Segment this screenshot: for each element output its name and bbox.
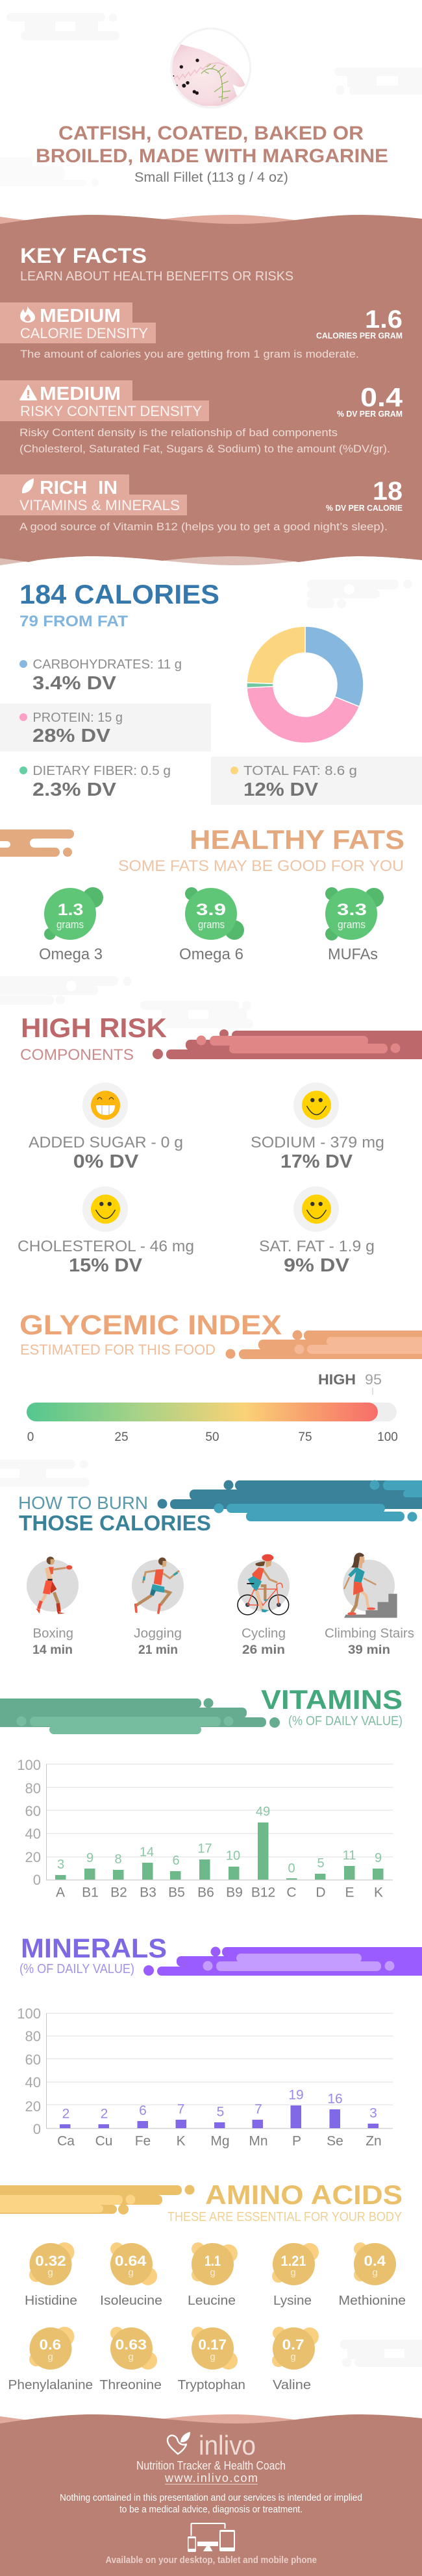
bar chart: minerals: 100 [17,2006,41,2022]
subheading: minerals: (% OF DAILY VALUE) [19,1962,134,1976]
amino acid: threonine: 0.63 [115,2337,147,2353]
legend: carbohydrates [19,657,182,694]
gauge: glycemic index: 50 [205,1430,219,1444]
bar chart: minerals: 16 [327,2091,343,2107]
amino acid: histidine: g [47,2267,53,2278]
panel: footer [0,2414,422,2576]
bar chart: vitamins: K [374,1885,383,1900]
bar chart: vitamins: 6 [172,1854,180,1868]
logo: inlivo: inlivo [199,2430,256,2460]
exercise: boxing [27,1556,79,1657]
gauge: glycemic index: 100 [377,1430,398,1444]
panel: key facts [0,215,422,578]
amino acid: valine [272,2327,319,2392]
legend: carbohydrates: 3.4% DV [32,673,117,694]
bar chart: vitamins: 49 [256,1805,270,1819]
risk item: added sugar: ADDED SUGAR - 0 g [29,1134,183,1151]
exercise: jogging: 21 min [138,1643,178,1657]
amino acid: phenylalanine [8,2327,93,2392]
legend: total fat: 12% DV [243,779,319,800]
amino acid: tryptophan: g [210,2351,216,2362]
fact: calorie density: CALORIE DENSITY [20,325,148,341]
subheading: healthy fats: SOME FATS MAY BE GOOD FOR YOU [118,857,404,875]
bar chart: vitamins: 0 [33,1872,41,1888]
gauge: glycemic index [27,1371,398,1444]
bar chart: vitamins: 80 [25,1780,41,1797]
icon: smiling emoji [91,1194,120,1224]
legend: total fat [211,757,422,805]
amino acid: tryptophan: Tryptophan [178,2378,245,2392]
title: BROILED, MADE WITH MARGARINE [36,145,388,167]
tagline: Nutrition Tracker & Health Coach [136,2459,286,2472]
icon: smiling emoji [302,1194,331,1224]
bar chart: minerals: 80 [25,2028,41,2044]
bar chart: vitamins: 11 [343,1848,356,1863]
legend: total fat: TOTAL FAT: 8.6 g [243,764,357,778]
amino acid: methionine [339,2242,406,2308]
amino acid: threonine [99,2327,162,2392]
bar chart: vitamins: 40 [25,1826,41,1842]
bar chart: vitamins: 60 [25,1803,41,1819]
subheading: key facts: LEARN ABOUT HEALTH BENEFITS OR RISKS [20,269,293,284]
risk item: saturated fat: 9% DV [284,1255,350,1276]
bar chart: minerals: Se [327,2134,343,2148]
fact: calorie density: MEDIUM [40,306,121,326]
bar chart: minerals: Mn [249,2134,268,2148]
stat: omega 6 [179,887,244,963]
fact: risky content density: % DV PER GRAM [337,409,403,419]
icon: flame [20,306,35,323]
title [36,123,388,167]
risk item: added sugar: 0% DV [73,1151,139,1172]
risk item: saturated fat: SAT. FAT - 1.9 g [259,1238,375,1255]
exercise: boxing: 14 min [32,1643,73,1657]
fact: rich in vitamins and minerals: A good source of Vitamin B12 (helps you to get a good night’s sleep). [19,521,388,533]
bar chart: vitamins: 5 [317,1856,325,1871]
bar chart: vitamins: E [345,1885,354,1900]
website: www.inlivo.com [164,2472,258,2484]
amino acid: methionine: 0.4 [364,2253,386,2269]
bar chart: minerals: Ca [57,2134,75,2148]
amino acid: leucine: g [210,2267,216,2278]
stat: omega 6: 3.9 [196,901,226,919]
bar chart: minerals: 60 [25,2052,41,2068]
stat: mufas: grams [338,918,366,931]
bar chart: minerals: 20 [25,2098,41,2115]
heading: minerals: MINERALS [21,1933,167,1963]
bar chart: vitamins: 9 [375,1851,382,1865]
risk item: sodium [251,1083,384,1172]
exercise: climbing stairs [325,1552,414,1657]
fact: rich in vitamins and minerals [0,474,403,533]
bar chart: minerals: 7 [177,2102,184,2117]
heading: amino acids: AMINO ACIDS [205,2179,403,2210]
amino acid: methionine: Methionine [339,2294,406,2308]
fact: risky content density: RISKY CONTENT DENSITY [20,403,202,419]
bar chart: minerals: 6 [139,2103,147,2118]
bar chart: vitamins: B6 [197,1885,214,1900]
bar chart: vitamins: C [286,1885,297,1900]
background cloud: amino acids [340,2340,422,2367]
stat: mufas: MUFAs [328,946,378,963]
amino acid: isoleucine: g [128,2267,134,2278]
heading: calories: 184 CALORIES [19,579,219,609]
banner shape: minerals [143,1947,422,1976]
fact: rich in vitamins and minerals: 18 [373,477,403,506]
subheading: amino acids: THESE ARE ESSENTIAL FOR YOUR BODY [168,2210,402,2224]
exercise: jogging [132,1558,184,1657]
stat: mufas: 3.3 [337,901,367,919]
legend: dietary fiber [19,764,171,800]
disclaimer: Nothing contained in this presentation and our services is intended or implied [60,2492,362,2503]
exercise: cycling: Cycling [242,1626,286,1641]
amino acid: phenylalanine: Phenylalanine [8,2378,93,2392]
amino acid: isoleucine [100,2242,162,2308]
fact: rich in vitamins and minerals: RICH IN [40,478,118,498]
bar chart: minerals: P [292,2134,301,2148]
bar chart: minerals: Cu [95,2134,112,2148]
bar chart: minerals: 2 [62,2107,69,2121]
gauge: glycemic index: 0 [27,1430,34,1444]
amino acid: methionine: g [372,2267,378,2278]
stat: omega 3: Omega 3 [39,946,103,963]
amino acid: valine: Valine [273,2378,311,2392]
icon: grinning emoji [91,1090,120,1120]
exercise: cycling [238,1554,290,1657]
bar chart: minerals: Mg [210,2134,230,2148]
gauge: glycemic index: HIGH [318,1371,356,1388]
bar chart: vitamins: 100 [17,1757,41,1773]
legend: protein [0,704,211,752]
stat: omega 3: 1.3 [58,901,83,919]
banner shape: glycemic index [226,1331,422,1359]
bar chart: minerals: 3 [369,2105,377,2121]
exercise: climbing stairs: 39 min [348,1643,390,1657]
fact: calorie density: CALORIES PER GRAM [316,331,403,340]
risk item: saturated fat [259,1186,375,1276]
legend: dietary fiber: 2.3% DV [32,779,117,800]
stat: omega 3 [39,887,103,963]
bar chart: vitamins: B3 [140,1885,156,1900]
amino acid: leucine [188,2242,238,2308]
bar chart: minerals: 19 [288,2087,304,2103]
exercise: climbing stairs: Climbing Stairs [325,1626,414,1641]
bar chart: minerals: 5 [217,2104,224,2120]
amino acid: isoleucine: Isoleucine [100,2294,162,2308]
icon: desktop, tablet and phone [188,2523,235,2552]
risk item: cholesterol: 15% DV [69,1255,143,1276]
bar chart: vitamins: 20 [25,1849,41,1865]
amino acid: valine: 0.7 [282,2337,304,2353]
chart: macronutrient donut [247,626,364,743]
fact: risky content density [0,380,403,455]
amino acid: threonine: Threonine [99,2378,162,2392]
serving size: Small Fillet (113 g / 4 oz) [134,170,288,185]
icon: woman on stairs [343,1552,397,1618]
heading: how to burn those calories: HOW TO BURN [18,1493,148,1513]
amino acid: leucine: Leucine [188,2294,236,2308]
bar chart: minerals [17,2006,393,2148]
title: CATFISH, COATED, BAKED OR [58,123,364,144]
risk item: cholesterol: CHOLESTEROL - 46 mg [18,1238,194,1255]
amino acid: lysine [272,2243,319,2308]
disclaimer [60,2492,362,2515]
subheading: calories from fat: 79 FROM FAT [19,613,128,630]
bar chart: minerals: 0 [33,2121,41,2137]
risk item: cholesterol [18,1186,194,1276]
banner shape: amino acids [0,2185,195,2214]
icon: jogger [132,1558,184,1613]
amino acid: isoleucine: 0.64 [115,2253,147,2269]
heading: how to burn those calories: THOSE CALORIES [19,1511,211,1535]
amino acid: histidine [25,2242,77,2308]
banner shape: healthy fats [0,829,88,857]
icon: warning triangle [20,386,36,400]
legend: protein: 28% DV [32,726,111,746]
background cloud: calories [307,580,412,608]
banner shape: how to burn [157,1480,422,1521]
background cloud: high risk right [140,1001,253,1028]
bar chart: minerals: Zn [366,2134,382,2148]
bar chart: vitamins: 3 [57,1858,64,1872]
bar chart: vitamins [17,1757,393,1900]
background cloud: title left [0,158,99,186]
bar chart: vitamins: D [316,1885,326,1900]
stat: omega 3: grams [56,918,84,931]
stat: omega 6: Omega 6 [179,946,243,963]
stat: omega 6: grams [198,918,225,931]
heading: high risk: HIGH RISK [21,1012,167,1043]
amino acid: lysine: Lysine [273,2294,312,2308]
bar chart: vitamins: B9 [226,1885,243,1900]
bar chart: vitamins: 14 [140,1845,154,1859]
gauge: glycemic index: 95 [365,1371,382,1388]
bar chart: minerals: 7 [254,2102,262,2117]
amino acid: lysine: 1.21 [280,2253,306,2269]
amino acid: leucine: 1.1 [205,2253,221,2269]
heading: glycemic index: GLYCEMIC INDEX [19,1310,282,1341]
bar chart: vitamins: B1 [82,1885,99,1900]
fact: risky content density: Risky Content density is the relationship of bad components [19,427,338,439]
icon: boxer [27,1556,79,1614]
bar chart: vitamins: 0 [288,1861,295,1876]
amino acid: tryptophan: 0.17 [199,2337,227,2353]
icon: smiling emoji [302,1090,331,1120]
fact: calorie density: The amount of calories you are getting from 1 gram is moderate. [20,349,359,360]
bar chart: vitamins: B12 [251,1885,275,1900]
bar chart: minerals: Fe [135,2134,151,2148]
icon: leaf [22,478,34,493]
logo: inlivo [168,2430,256,2460]
subheading: glycemic index: ESTIMATED FOR THIS FOOD [20,1342,216,1358]
legend: carbohydrates: CARBOHYDRATES: 11 g [32,657,182,672]
fact: risky content density: (Cholesterol, Saturated Fat, Sugars & Sodium) to the amount (%DV/gr). [19,443,390,455]
background cloud: high risk left [0,976,132,1005]
subheading: components: COMPONENTS [20,1046,134,1064]
bar chart: vitamins: 9 [86,1851,93,1865]
exercise: cycling: 26 min [242,1643,285,1657]
heading: vitamins: VITAMINS [261,1684,403,1715]
banner shape: high risk [153,1029,422,1059]
fact: risky content density: MEDIUM [40,384,121,404]
bar chart: minerals: K [177,2134,186,2148]
amino acid: histidine: Histidine [25,2294,77,2308]
amino acid: phenylalanine: g [47,2351,53,2362]
risk item: sodium: SODIUM - 379 mg [251,1134,384,1151]
amino acid: threonine: g [128,2351,134,2362]
icon: cyclist [238,1554,290,1615]
bar chart: vitamins: B5 [168,1885,185,1900]
fact: rich in vitamins and minerals: VITAMINS & MINERALS [19,497,180,513]
heading: how to burn those calories [18,1493,211,1535]
risk item: added sugar [29,1083,183,1172]
amino acid: valine: g [290,2351,296,2362]
bar chart: vitamins: 17 [197,1842,212,1856]
bar chart: vitamins: A [56,1885,65,1900]
exercise: jogging: Jogging [134,1626,182,1641]
bar chart: minerals: 2 [101,2107,108,2121]
stat: mufas [325,887,384,963]
bar chart: vitamins: B2 [110,1885,127,1900]
banner shape: vitamins [0,1698,280,1734]
bar chart: minerals: 40 [25,2074,41,2091]
background cloud: how to burn [0,1460,90,1487]
heading: healthy fats: HEALTHY FATS [190,824,404,855]
amino acid: histidine: 0.32 [35,2253,66,2269]
fact: calorie density: 1.6 [365,306,403,334]
amino acid: tryptophan [178,2327,245,2392]
food photo: catfish fillet [169,29,251,108]
bar chart: vitamins: 10 [226,1849,240,1863]
amino acid: phenylalanine: 0.6 [40,2337,61,2353]
amino acid: lysine: g [290,2267,296,2278]
legend: protein: PROTEIN: 15 g [32,711,123,725]
fact: rich in vitamins and minerals: % DV PER CALORIE [326,503,403,513]
availability note: Available on your desktop, tablet and mobile phone [105,2555,317,2566]
fact: risky content density: 0.4 [360,382,403,412]
risk item: sodium: 17% DV [280,1151,353,1172]
background cloud: top right [334,67,422,95]
disclaimer: to be a medical advice, diagnosis or treatment. [119,2504,303,2515]
gauge: glycemic index: 25 [114,1430,129,1444]
bar chart: vitamins: 8 [114,1852,122,1867]
fact: calorie density [0,302,403,360]
background cloud: top left [6,13,119,40]
legend: dietary fiber: DIETARY FIBER: 0.5 g [32,764,171,778]
heading: key facts: KEY FACTS [20,244,147,267]
exercise: boxing: Boxing [32,1626,73,1641]
subheading: vitamins: (% OF DAILY VALUE) [288,1714,403,1728]
gauge: glycemic index: 75 [298,1430,312,1444]
